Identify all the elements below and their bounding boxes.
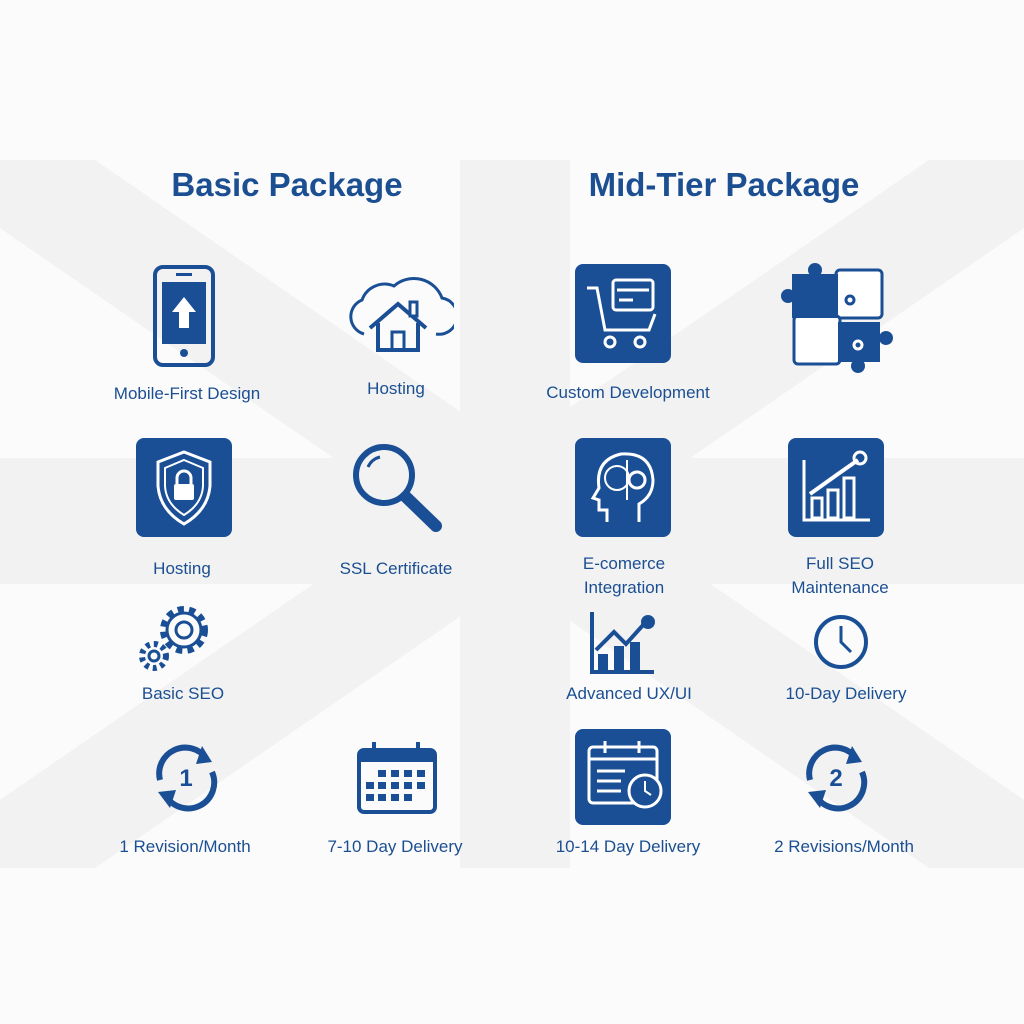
label: Full SEO Maintenance: Maintenance — [791, 578, 889, 597]
icon: clock — [814, 615, 868, 669]
icon: calendar clock box — [575, 729, 671, 825]
label: E-comerce Integration: E-comerce — [583, 554, 665, 573]
label: Full SEO Maintenance: Full SEO — [806, 554, 874, 573]
label: Hosting: Hosting — [367, 379, 425, 398]
title: Mid-Tier Package: Mid-Tier Package — [589, 166, 859, 203]
background pattern — [0, 160, 1024, 868]
icon: brain box — [575, 438, 671, 537]
label: Basic SEO: Basic SEO — [142, 684, 224, 703]
icon: calendar — [357, 742, 437, 814]
icon: revision 2 — [806, 744, 868, 812]
label: Advanced UX/UI: Advanced UX/UI — [566, 684, 692, 703]
icon: chart box — [788, 438, 884, 537]
label: Hosting: Hosting — [153, 559, 211, 578]
label: Custom Development: Custom Development — [546, 383, 710, 402]
icon: phone — [153, 265, 215, 367]
icon: shield box — [136, 438, 232, 537]
icon: magnifier — [353, 444, 442, 532]
icon: revision 2: 2 — [829, 765, 843, 792]
label: 1 Revision/Month: 1 Revision/Month — [119, 837, 251, 856]
label: 7-10 Day Delivery: 7-10 Day Delivery — [327, 837, 463, 856]
label: Full SEO Maintenance — [791, 554, 889, 597]
icon: revision 1 — [156, 744, 218, 812]
label: E-comerce Integration — [583, 554, 665, 597]
label: 2 Revisions/Month: 2 Revisions/Month — [774, 837, 914, 856]
label: Mobile-First Design: Mobile-First Design — [114, 384, 260, 403]
icon: revision 1: 1 — [179, 765, 193, 792]
icon: gears — [139, 606, 208, 671]
label: SSL Certificate: SSL Certificate — [340, 559, 452, 578]
label: 10-Day Delivery: 10-Day Delivery — [786, 684, 906, 703]
icon: cart box — [575, 264, 671, 363]
label: E-comerce Integration: Integration — [584, 578, 664, 597]
icon: puzzle — [781, 263, 893, 373]
label: 10-14 Day Delivery: 10-14 Day Delivery — [556, 837, 700, 856]
icon: chart wrench — [590, 612, 655, 674]
icon: cloud house — [349, 277, 454, 352]
title: Basic Package: Basic Package — [171, 166, 403, 203]
